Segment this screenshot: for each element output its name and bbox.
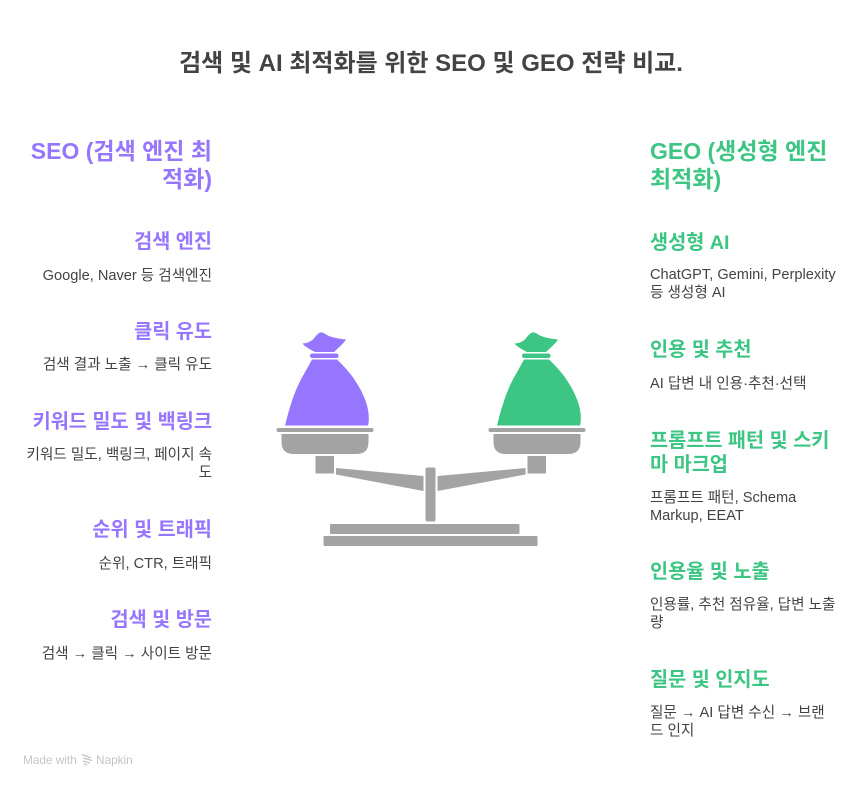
item text: 검색 및 방문: 검색 → 클릭 → 사이트 방문 [42,646,212,662]
title: 검색 및 AI 최적화를 위한 SEO 및 GEO 전략 비교. [179,50,683,77]
item text: 인용율: 인용률, 추천 점유율, 답변 노출 [650,597,835,613]
item heading: 순위 및 트래픽: 순위 및 트래픽 [92,519,212,541]
item text: 생성형 AI: 등 생성형 AI [650,285,726,301]
item text: 질문 [650,704,825,739]
item text: 인용 및 추천: AI 답변 내 인용·추천·선택 [650,376,807,392]
item heading: 검색 엔진: 검색 엔진 [134,231,212,253]
item text: 질문: 질문 → AI 답변 수신 → 브랜 [650,705,825,721]
heading: GEO: GEO (생성형 엔진 [650,138,827,164]
item text: 인용율: 량 [650,615,663,631]
item text: 키워드 밀도 [27,446,212,481]
item text: 생성형 AI [650,267,836,301]
item heading: 생성형 AI: 생성형 AI [650,232,730,254]
item heading: 인용 및 추천: 인용 및 추천 [650,339,752,361]
watermark: Made with Napkin [23,753,133,767]
panel: GEO [650,138,836,739]
right pan [488,428,586,454]
green bag [497,332,581,426]
item text: 프롬프트 패턴: 프롬프트 패턴, Schema [650,490,796,506]
item heading: 프롬프트 패턴: 프롬프트 패턴 및 스키 [650,430,829,452]
item heading: 프롬프트 패턴: 마 마크업 [650,454,728,476]
balance scale illustration [276,332,586,546]
scale base [324,468,538,546]
item heading: 키워드 밀도 및 백링크: 키워드 밀도 및 백링크 [33,411,212,433]
item text: 검색 엔진: Google, Naver 등 검색엔진 [43,268,212,284]
item text: 키워드 밀도: 도 [199,465,212,481]
scale beam [316,456,546,491]
item text: 클릭 유도: 검색 결과 노출 → 클릭 유도 [43,357,212,373]
heading: GEO: 최적화) [650,166,721,192]
item heading: 질문 및 인지도: 질문 및 인지도 [650,669,770,691]
heading: SEO: SEO (검색 엔진 최 [31,138,212,164]
watermark: Made with Napkin: Made with [23,753,77,767]
item text: 질문: 드 인지 [650,723,694,739]
left pan [276,428,374,454]
heading: SEO: 적화) [162,166,212,192]
heading: SEO [31,138,212,192]
item text: 순위: 순위, CTR, 트래픽 [99,556,212,572]
panel: SEO [27,138,212,662]
item text: 생성형 AI: ChatGPT, Gemini, Perplexity [650,267,836,283]
item heading: 클릭 유도: 클릭 유도 [134,321,212,343]
icon: napkin logo [82,754,92,766]
item text: 프롬프트 패턴: Markup, EEAT [650,508,744,524]
purple bag [285,332,369,426]
item text: 프롬프트 패턴 [650,490,796,524]
heading: GEO [650,138,827,192]
item text: 인용율 [650,596,835,631]
item text: 키워드 밀도: 키워드 밀도, 백링크, 페이지 속 [27,447,212,463]
item heading: 인용율 및 노출: 인용율 및 노출 [650,561,770,583]
item heading: 검색 및 방문: 검색 및 방문 [110,609,212,631]
watermark: Made with Napkin: Napkin [96,753,133,767]
item heading: 프롬프트 패턴 [650,430,829,476]
